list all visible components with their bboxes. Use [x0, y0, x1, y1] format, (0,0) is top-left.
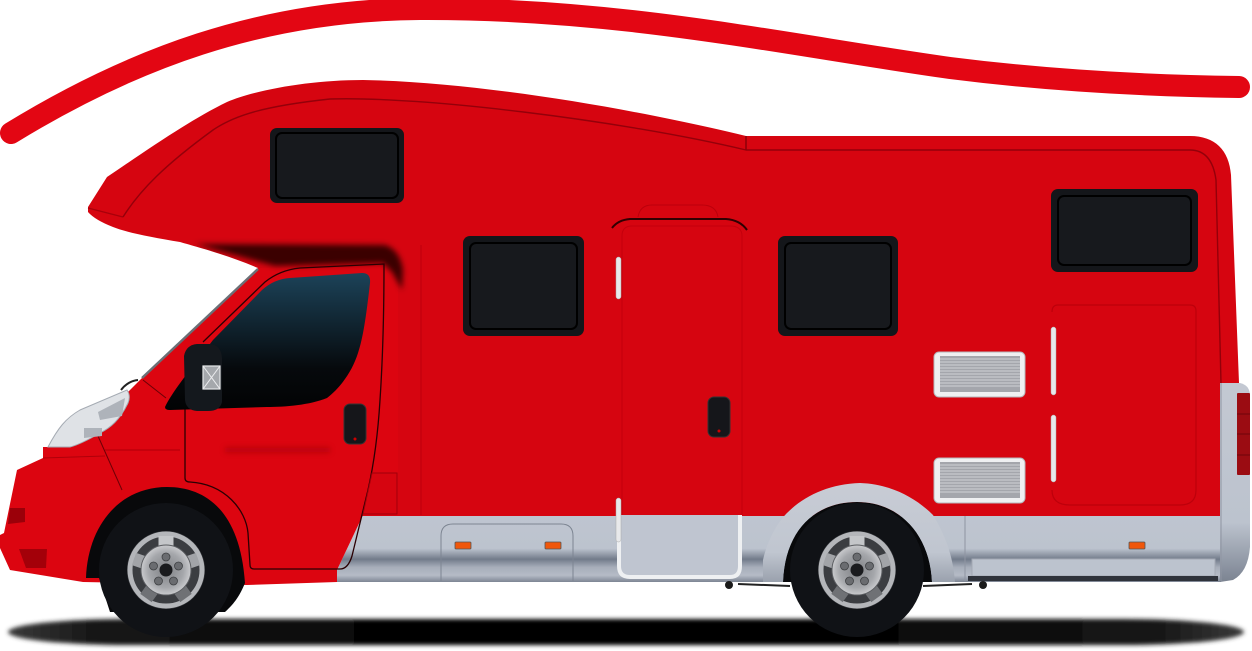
- grey lower skirt: [337, 383, 1250, 589]
- rear tail light: [1237, 393, 1250, 475]
- vent: lower: [934, 458, 1025, 503]
- window: rear: [1051, 189, 1198, 272]
- grille and fog light: [8, 508, 25, 524]
- headlight: [48, 390, 129, 447]
- wing mirror: [184, 344, 222, 411]
- cab: [0, 244, 403, 585]
- body creases: [98, 380, 166, 490]
- window: left side: [463, 236, 584, 336]
- arch trim: [763, 483, 955, 582]
- roof seam: [123, 99, 1221, 383]
- swoosh line: [11, 9, 1239, 133]
- front wheel: [99, 503, 233, 637]
- ground shadow: [8, 619, 1244, 645]
- side panel behind cab: [363, 473, 397, 514]
- front wheel arch: [86, 487, 245, 612]
- rear wheel arch: [763, 483, 955, 582]
- body fold behind cab: [420, 245, 422, 515]
- marker lights: [455, 542, 471, 549]
- overcab underside shadow: [195, 244, 403, 290]
- windscreen edge: [142, 269, 258, 378]
- main red body: [88, 80, 1239, 516]
- rear locker door: [1051, 305, 1196, 505]
- rear wheel: [790, 503, 924, 637]
- window: right of door: [778, 236, 898, 336]
- cab window: [165, 273, 370, 410]
- door handle: [344, 404, 366, 444]
- entry door: [612, 205, 747, 577]
- window: overcab: [270, 128, 404, 203]
- rear bumper corner: [1220, 383, 1250, 582]
- side step: [972, 559, 1215, 576]
- storage locker: [441, 524, 573, 581]
- nose crease: [88, 208, 123, 217]
- vent: upper: [934, 352, 1025, 397]
- door outline: [185, 264, 384, 569]
- chassis rods: [738, 584, 972, 586]
